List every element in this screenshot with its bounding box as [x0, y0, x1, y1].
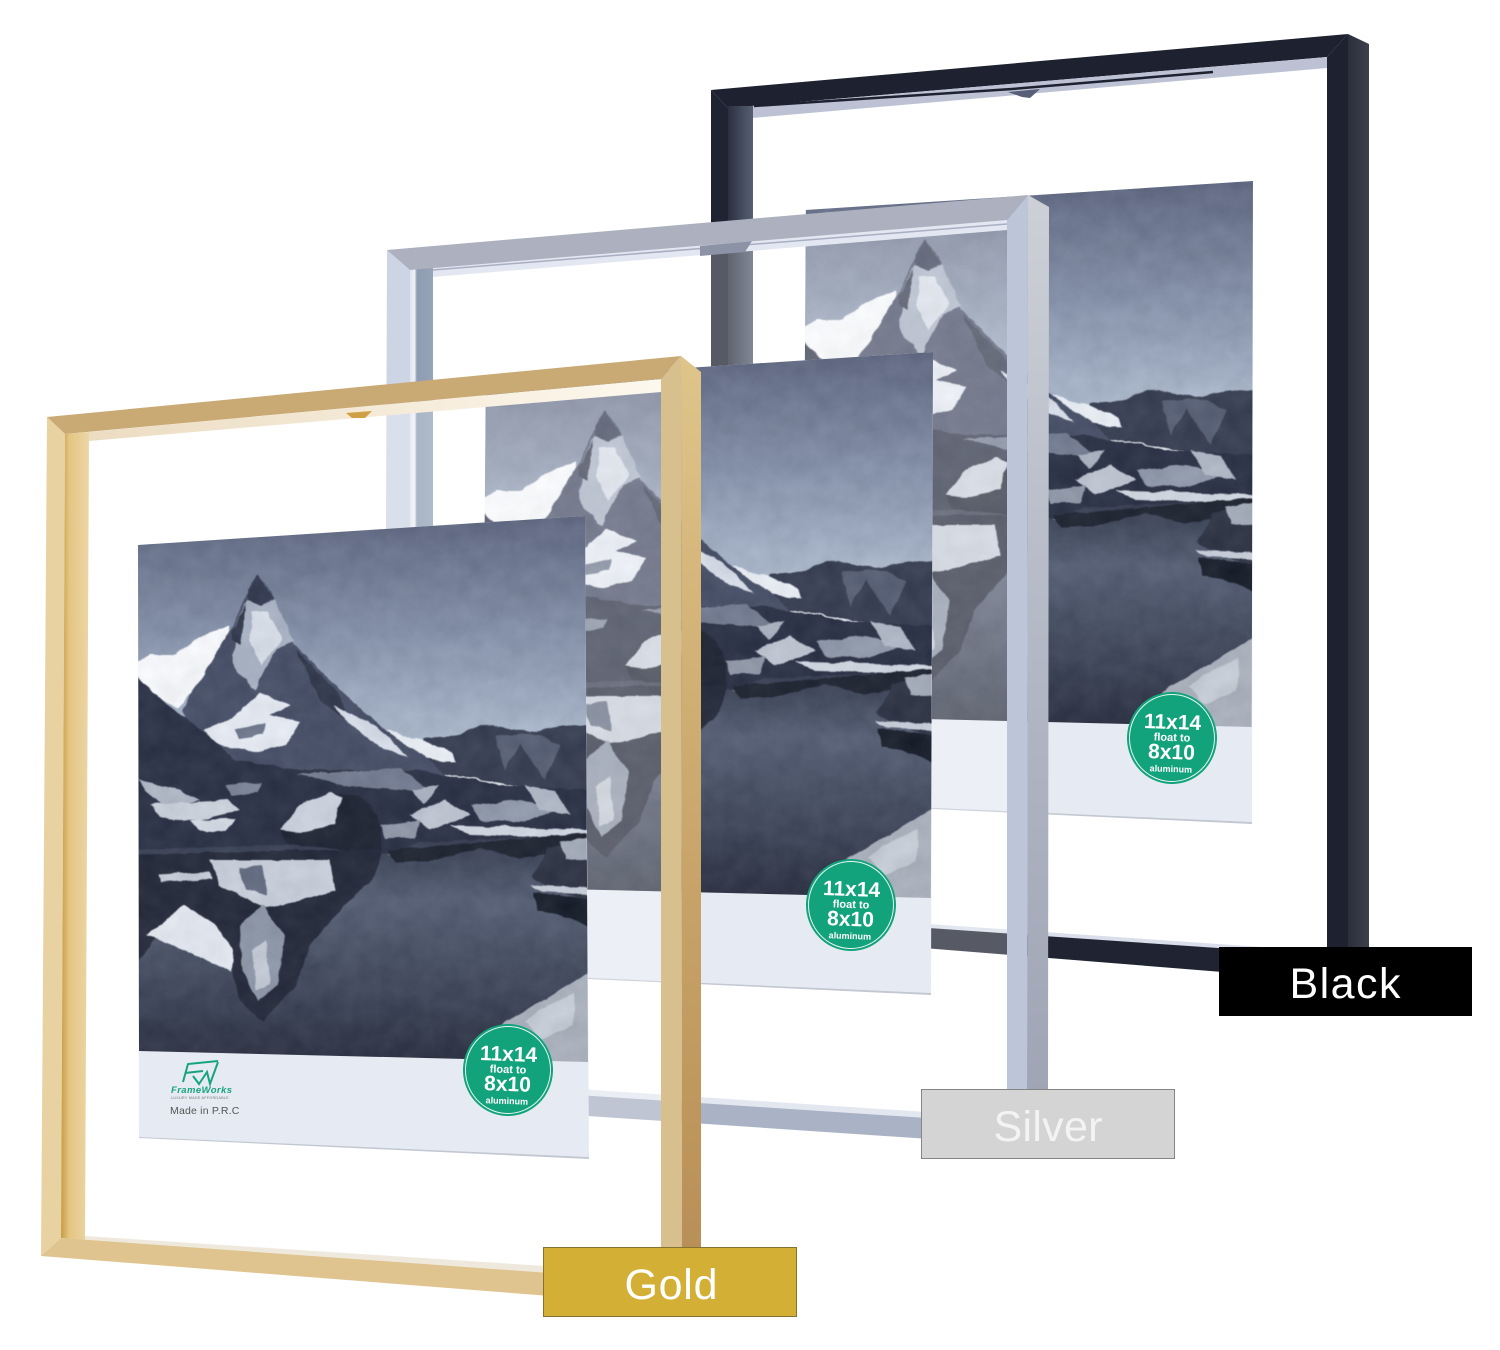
panel: black frame — [711, 34, 1369, 990]
logo: FrameWorks — [171, 1061, 232, 1100]
label: Gold: Gold — [624, 1261, 718, 1309]
badge: 11x14 float to 8x10 aluminum, silver frame: 11x14 — [823, 877, 881, 902]
gold frame bottom bar — [41, 1236, 550, 1296]
label: Silver: Silver — [994, 1103, 1102, 1151]
silver frame glass — [410, 220, 1007, 1130]
silver frame bottom bar — [380, 1076, 1048, 1147]
gold frame inner lip — [89, 379, 661, 441]
black frame left bar — [711, 90, 753, 936]
badge: 11x14 float to 8x10 aluminum, silver frame: float to — [832, 898, 870, 912]
label: Silver — [922, 1090, 1174, 1158]
badge: 11x14 float to 8x10 aluminum, gold frame: aluminum — [485, 1095, 528, 1107]
badge: 11x14 float to 8x10 aluminum, black frame: 11x14 — [1144, 710, 1202, 735]
badge: 11x14 float to 8x10 aluminum, gold frame: 8x10 — [484, 1072, 531, 1097]
text: Made in P.R.C: Made in P.R.C — [170, 1105, 240, 1117]
label: Black — [1219, 947, 1472, 1016]
badge: 11x14 float to 8x10 aluminum, silver frame: aluminum — [828, 930, 871, 942]
silver frame left bar — [384, 250, 433, 1096]
panel: silver frame — [380, 195, 1049, 1147]
badge: 11x14 float to 8x10 aluminum, black frame: 8x10 — [1148, 740, 1195, 765]
label: Gold — [544, 1248, 796, 1316]
silver frame top bar — [387, 195, 1028, 270]
panel: gold frame — [41, 356, 701, 1296]
photo card in silver frame — [462, 336, 958, 995]
black frame inner lip — [752, 57, 1327, 118]
gold frame glass — [61, 379, 661, 1270]
badge: 11x14 float to 8x10 aluminum, gold frame: float to — [489, 1063, 527, 1077]
gold frame right bar — [661, 356, 701, 1250]
badge: 11x14 float to 8x10 aluminum, gold frame: 11x14 — [480, 1042, 538, 1067]
silver frame inner lip — [433, 218, 1007, 277]
badge: 11x14 float to 8x10 aluminum, gold frame — [461, 1022, 555, 1118]
black frame right bar — [1327, 34, 1369, 990]
badge: 11x14 float to 8x10 aluminum, black frame: float to — [1153, 731, 1191, 745]
badge: 11x14 float to 8x10 aluminum, silver frame — [804, 857, 898, 953]
gold frame left bar — [41, 417, 89, 1256]
badge: 11x14 float to 8x10 aluminum, silver frame: 8x10 — [827, 907, 874, 932]
photo card in black frame — [783, 165, 1278, 824]
badge: 11x14 float to 8x10 aluminum, black frame — [1125, 690, 1219, 786]
label: Black: Black — [1290, 960, 1401, 1008]
silver frame right bar — [1007, 195, 1049, 1095]
black frame top bar — [711, 34, 1348, 108]
logo: FrameWorks: LUXURY MADE AFFORDABLE — [171, 1096, 229, 1100]
photo card in gold frame — [120, 500, 610, 1159]
logo: FrameWorks: FrameWorks — [171, 1085, 232, 1096]
gold frame top bar — [47, 356, 681, 434]
badge: 11x14 float to 8x10 aluminum, black frame: aluminum — [1149, 763, 1192, 775]
black frame bottom bar — [711, 909, 1348, 982]
